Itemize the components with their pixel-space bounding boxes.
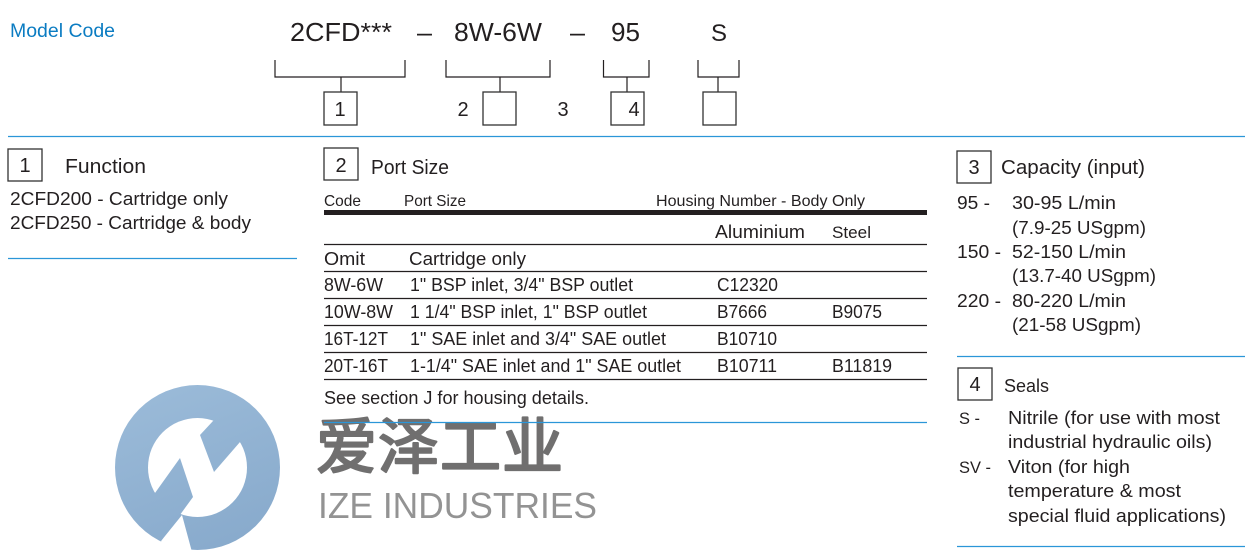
panel: capacity <box>957 151 1245 356</box>
header row: Code <box>324 193 361 210</box>
row 16T-12T: 16T-12T <box>324 329 388 349</box>
material sub-header: Steel <box>832 223 871 242</box>
row 20T-16T: B11819 <box>832 356 892 376</box>
watermark english name: IZE INDUSTRIES <box>318 485 597 526</box>
seals heading: Seals <box>1004 376 1049 396</box>
material sub-header <box>715 222 871 242</box>
row 16T-12T: 1" SAE inlet and 3/4" SAE outlet <box>410 329 666 349</box>
seal SV: special fluid applications) <box>1008 506 1226 526</box>
seal SV: SV - <box>959 458 991 477</box>
port size number box <box>324 148 358 180</box>
function number box <box>8 149 42 181</box>
header row: Housing Number - Body Only <box>656 193 865 210</box>
capacity 95: 30-95 L/min <box>1012 193 1116 213</box>
row 8W-6W: 1" BSP inlet, 3/4" BSP outlet <box>410 275 633 295</box>
bracket 1 <box>275 60 405 92</box>
bracket 2 <box>446 60 550 92</box>
row 16T-12T <box>324 329 777 349</box>
seal S: Nitrile (for use with most <box>1008 408 1220 428</box>
code segment: series: 2CFD*** <box>290 17 392 47</box>
capacity 95: 95 - <box>957 193 990 213</box>
row 20T-16T: 1-1/4" SAE inlet and 1" SAE outlet <box>410 356 681 376</box>
port size table <box>324 193 927 380</box>
housing note: See section J for housing details. <box>324 388 589 408</box>
box 4 <box>703 92 736 125</box>
capacity 95 <box>957 193 1146 238</box>
bracket 4 <box>698 60 739 92</box>
seal SV: Viton (for high <box>1008 457 1130 477</box>
row 10W-8W: 1 1/4" BSP inlet, 1" BSP outlet <box>410 302 647 322</box>
code segment: seals: S <box>711 20 727 47</box>
capacity 220: 220 - <box>957 291 1001 311</box>
code segment: port size: 8W-6W <box>454 17 542 47</box>
panel: port size <box>324 148 927 408</box>
row omit <box>324 249 526 269</box>
row 20T-16T <box>324 356 892 376</box>
row 8W-6W: C12320 <box>717 275 778 295</box>
seal SV <box>959 457 1226 526</box>
capacity 220 <box>957 291 1141 335</box>
function option 1: 2CFD200 - Cartridge only <box>10 189 228 209</box>
seals number: 4 <box>969 374 981 396</box>
number 3: 3 <box>557 99 569 121</box>
row 10W-8W <box>324 302 882 322</box>
capacity 150: 52-150 L/min <box>1012 242 1126 262</box>
row omit: Cartridge only <box>409 249 526 269</box>
panel: function <box>8 149 297 258</box>
watermark text <box>316 397 597 526</box>
model code label: Model Code <box>10 21 115 42</box>
box 2 <box>483 92 516 125</box>
logo left tooth <box>150 458 193 541</box>
row 8W-6W <box>324 275 778 295</box>
capacity 95: (7.9-25 USgpm) <box>1012 218 1146 238</box>
panel: seals <box>957 368 1245 546</box>
function option 2: 2CFD250 - Cartridge & body <box>10 213 251 233</box>
capacity number: 3 <box>968 157 980 179</box>
material sub-header: Aluminium <box>715 222 805 242</box>
row 8W-6W: 8W-6W <box>324 275 383 295</box>
logo inner <box>148 418 247 517</box>
row 20T-16T: 20T-16T <box>324 356 388 376</box>
logo right tooth <box>200 410 250 472</box>
capacity 150: 150 - <box>957 242 1001 262</box>
logo lower wedge <box>161 515 192 556</box>
dash two: – <box>570 17 586 47</box>
row 16T-12T: B10710 <box>717 329 777 349</box>
bracket 3 <box>604 60 649 92</box>
row 10W-8W: B7666 <box>717 302 767 322</box>
row omit: Omit <box>324 249 365 269</box>
capacity heading: Capacity (input) <box>1001 157 1145 179</box>
box 3 <box>611 92 644 125</box>
box 1 <box>324 92 357 125</box>
code segment: capacity: 95 <box>611 17 640 47</box>
capacity 150: (13.7-40 USgpm) <box>1012 266 1156 286</box>
seal S <box>959 408 1220 452</box>
port size number: 2 <box>335 155 347 177</box>
seal S: S - <box>959 409 980 428</box>
capacity 220: 80-220 L/min <box>1012 291 1126 311</box>
header row: Port Size <box>404 193 466 210</box>
row 20T-16T: B10711 <box>717 356 777 376</box>
number 2: 2 <box>457 99 469 121</box>
watermark chinese name: 爱泽工业 <box>316 397 563 486</box>
capacity 220: (21-58 USgpm) <box>1012 315 1141 335</box>
function heading: Function <box>65 156 146 178</box>
header row <box>324 193 865 210</box>
logo ring <box>115 385 280 550</box>
dash one: – <box>417 17 433 47</box>
function number: 1 <box>19 155 31 177</box>
model code diagram <box>275 17 739 125</box>
number 1: 1 <box>334 99 346 121</box>
number 4: 4 <box>628 99 640 121</box>
capacity 150 <box>957 242 1156 286</box>
port size heading: Port Size <box>371 157 449 179</box>
seal SV: temperature & most <box>1008 481 1181 501</box>
row 10W-8W: B9075 <box>832 302 882 322</box>
capacity number box <box>957 151 991 183</box>
logo watermark <box>115 385 280 556</box>
row 10W-8W: 10W-8W <box>324 302 393 322</box>
seals number box <box>958 368 992 400</box>
seal S: industrial hydraulic oils) <box>1008 432 1212 452</box>
